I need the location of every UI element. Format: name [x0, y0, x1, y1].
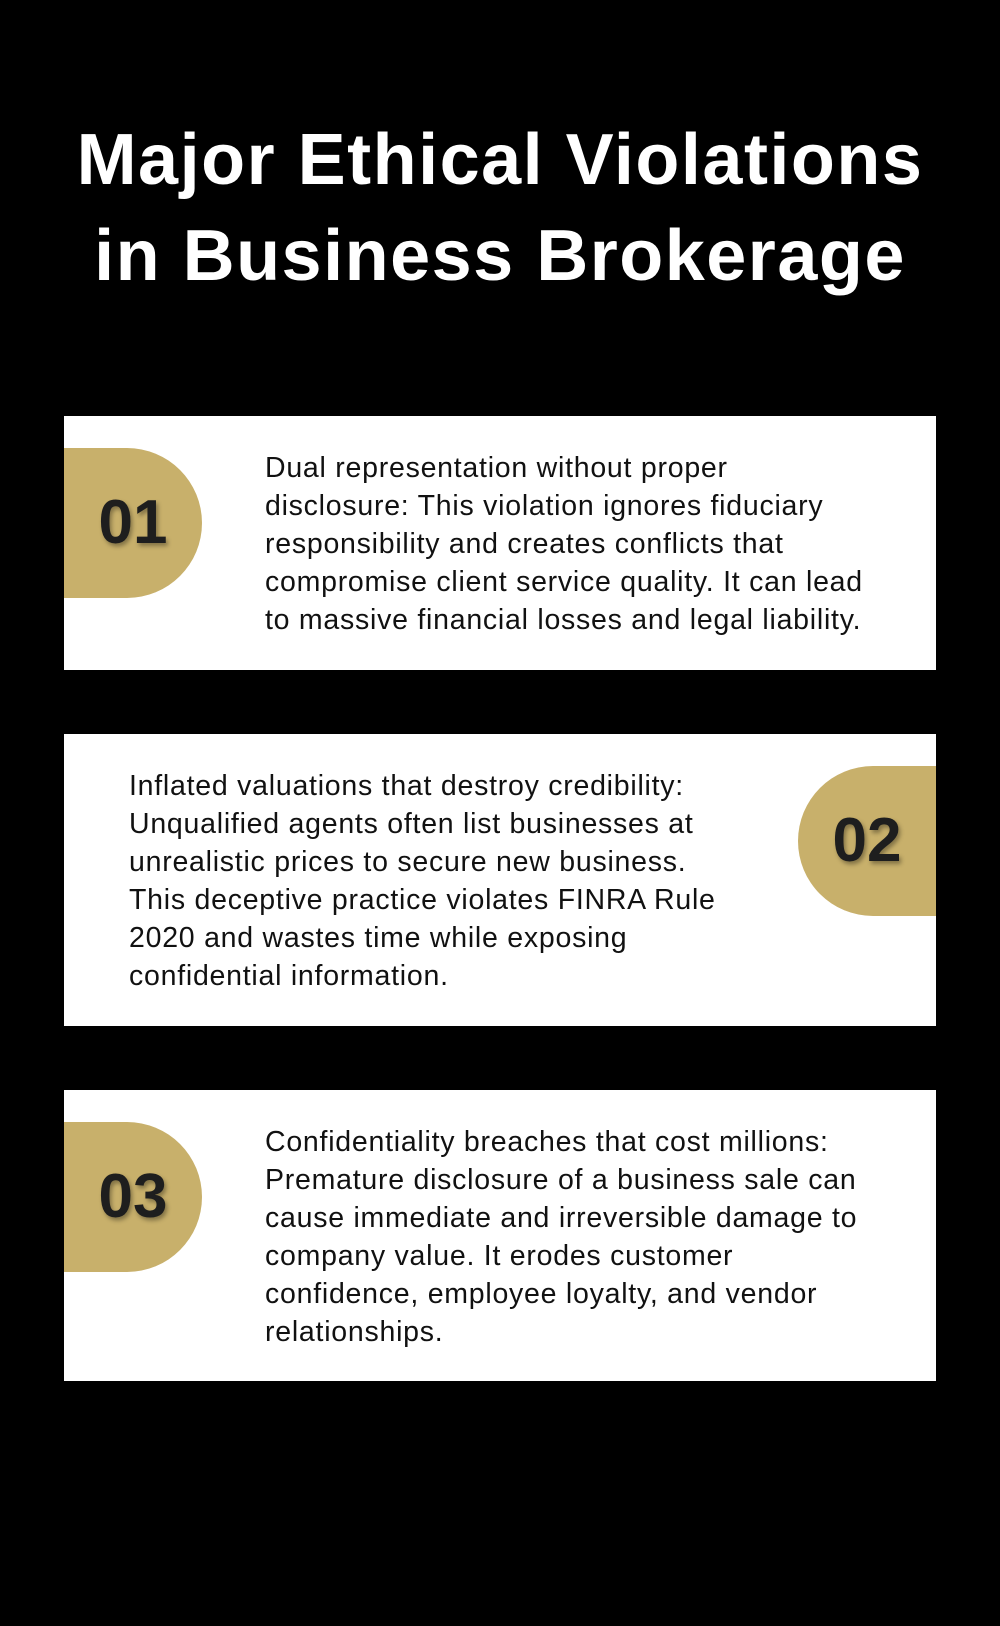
text: inflated valuations: This deceptive practice violates FINRA Rule [129, 884, 716, 916]
text: confidentiality breaches: company value. It erodes customer [265, 1240, 733, 1272]
text: dual representation [265, 452, 863, 636]
text: inflated valuations: confidential information. [129, 960, 449, 992]
text: confidentiality breaches: Confidentiality breaches that cost millions: [265, 1126, 829, 1158]
text: dual representation: compromise client service quality. It can lead [265, 566, 863, 598]
text: dual representation: Dual representation without proper [265, 452, 728, 484]
badge: 03 [64, 1122, 202, 1272]
text: dual representation: responsibility and creates conflicts that [265, 528, 784, 560]
text: confidentiality breaches [265, 1126, 857, 1348]
text: dual representation: to massive financial losses and legal liability. [265, 604, 861, 636]
text: confidentiality breaches: cause immediate and irreversible damage to [265, 1202, 857, 1234]
title: in Business Brokerage [94, 216, 906, 296]
badge: 01: 01 [99, 488, 167, 557]
text: inflated valuations: 2020 and wastes time while exposing [129, 922, 627, 954]
badge: 01 [64, 448, 202, 598]
badge: 03: 03 [99, 1162, 167, 1231]
text: dual representation: disclosure: This violation ignores fiduciary [265, 490, 823, 522]
text: inflated valuations: Inflated valuations that destroy credibility: [129, 770, 684, 802]
badge: 02 [798, 766, 936, 916]
text: confidentiality breaches: confidence, employee loyalty, and vendor [265, 1278, 817, 1310]
text: inflated valuations [129, 770, 716, 992]
text: confidentiality breaches: relationships. [265, 1316, 443, 1348]
badge: 02: 02 [833, 806, 901, 875]
panel: 01 dual representation [64, 416, 936, 670]
text: inflated valuations: unrealistic prices to secure new business. [129, 846, 686, 878]
panel: 03 confidentiality breaches [64, 1090, 936, 1381]
text: inflated valuations: Unqualified agents often list businesses at [129, 808, 694, 840]
title: Major Ethical Violations [77, 120, 923, 200]
text: confidentiality breaches: Premature disclosure of a business sale can [265, 1164, 856, 1196]
panel: 02 inflated valuations [64, 734, 936, 1026]
title [77, 120, 923, 296]
